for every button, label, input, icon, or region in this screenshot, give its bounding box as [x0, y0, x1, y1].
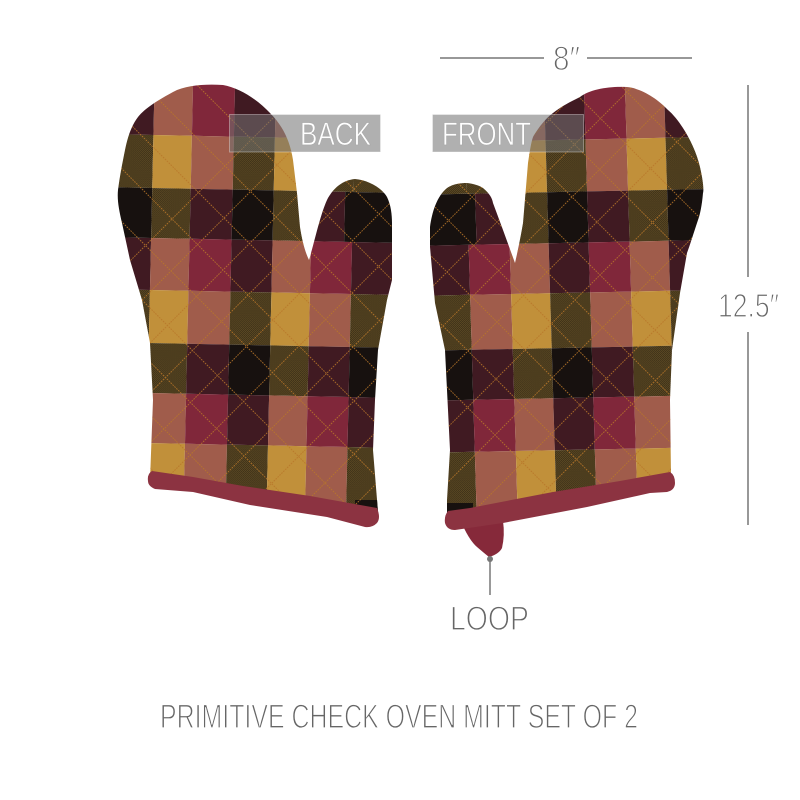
hanging loop — [463, 521, 504, 557]
product title: PRIMITIVE CHECK OVEN MITT SET OF 2 — [160, 698, 638, 736]
right oven mitt (front) — [430, 86, 704, 556]
back label — [230, 114, 380, 152]
height dimension: 12.5 inches: 12.5″ — [718, 287, 779, 324]
infographic canvas — [118, 46, 778, 728]
width dimension: 8 inches: 8″ — [553, 40, 580, 78]
left mitt red cuff — [148, 471, 379, 527]
left mitt plaid fabric — [118, 84, 392, 511]
loop callout: LOOP — [450, 600, 529, 638]
back label: BACK — [300, 116, 371, 152]
right mitt red cuff — [445, 472, 675, 530]
front label: FRONT — [442, 116, 531, 152]
left oven mitt (back) — [118, 84, 392, 528]
loop callout — [450, 556, 529, 638]
right mitt plaid fabric — [430, 86, 704, 512]
